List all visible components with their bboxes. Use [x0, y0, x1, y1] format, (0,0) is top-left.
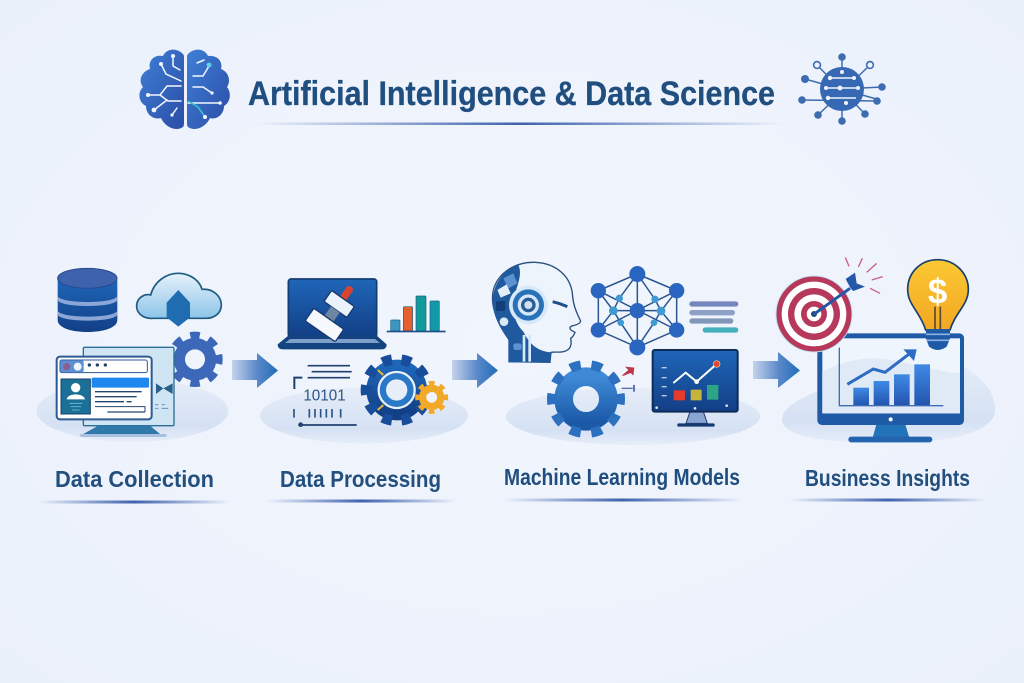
arrow 3: [753, 352, 800, 388]
small arrows: [622, 367, 634, 392]
platform: [506, 388, 760, 445]
arrow 2: [452, 353, 498, 388]
label: data processing: Data Processing: [280, 466, 441, 492]
platform: [36, 380, 228, 442]
icon: lightbulb with dollar sign: [908, 260, 968, 350]
icon group: processing: [278, 276, 446, 427]
panel: data collection: [36, 268, 230, 504]
icon: gear: [171, 335, 219, 383]
underline: [790, 498, 987, 502]
icon group: collection: [57, 268, 221, 437]
label: data collection: Data Collection: [55, 466, 214, 492]
underline: [503, 498, 741, 502]
platform: [260, 388, 468, 444]
icon: circuit brain: [139, 50, 230, 129]
icon: cloud upload: [137, 273, 221, 327]
icon: browser windows: [57, 347, 174, 437]
icon: data network globe: [798, 53, 886, 125]
icon: lightbulb with dollar sign: $: [928, 272, 947, 311]
header: [139, 50, 886, 129]
label: machine learning models: Machine Learning Models: [504, 464, 740, 490]
bar chart: [387, 296, 446, 332]
panel: data processing: [260, 276, 468, 502]
icon: database: [58, 268, 117, 332]
panel: machine learning models: [492, 262, 760, 502]
underline: [38, 500, 230, 504]
binary data block: [294, 366, 357, 427]
icon: AI head: [492, 262, 581, 362]
label: business insights: Business Insights: [805, 465, 970, 491]
icon: blue gear: [552, 365, 620, 433]
icon group: insights: [776, 257, 968, 442]
text lines: [689, 301, 738, 333]
underline: [267, 500, 457, 502]
title underline: [255, 122, 785, 125]
panel: business insights: [776, 257, 995, 502]
title: Artificial Intelligence & Data Science: [248, 75, 775, 113]
icon: large gear: [366, 359, 427, 421]
icon: target with dart: [776, 257, 883, 352]
platform: [782, 356, 995, 443]
icon: neural network: [591, 266, 684, 355]
icon: monitor with growth chart: [817, 333, 964, 442]
binary data block: 10101: [303, 388, 346, 405]
icon: laptop with brush: [278, 276, 387, 349]
icon group: machine learning: [492, 262, 738, 433]
icon: small gear: [417, 383, 446, 412]
icon: monitor with chart: [653, 350, 738, 427]
arrow 1: [232, 353, 278, 388]
